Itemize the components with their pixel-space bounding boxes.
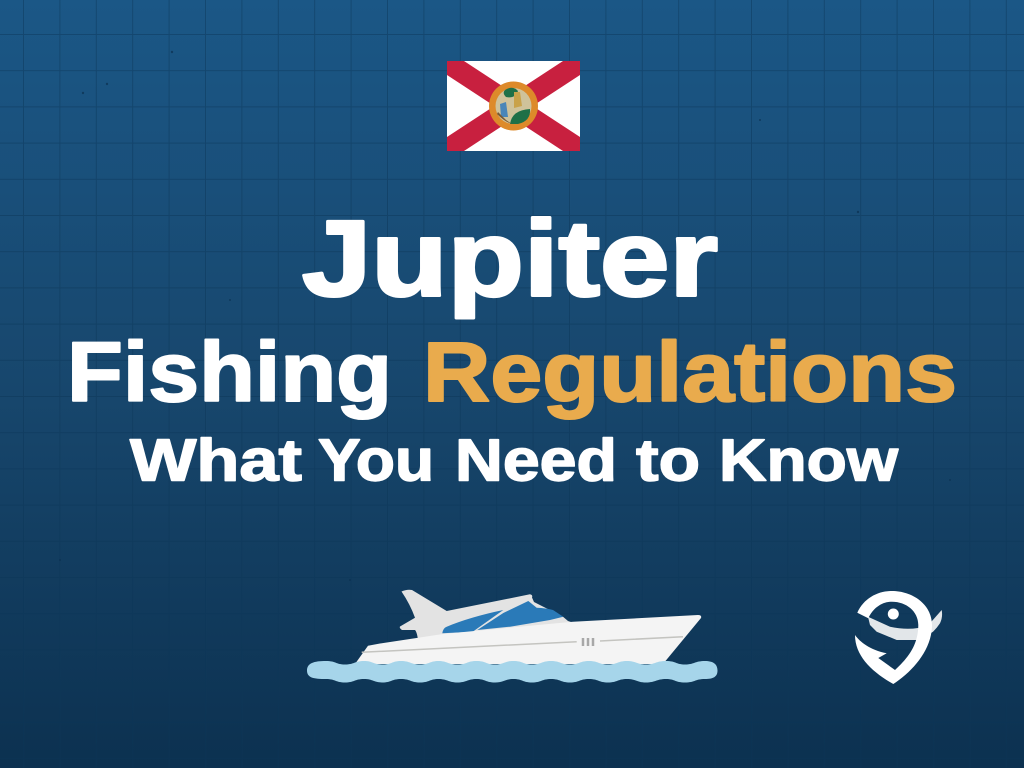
subtitle: You (318, 428, 434, 494)
icon: fish logo (855, 591, 942, 684)
icon: Florida flag (447, 61, 580, 151)
title: Jupiter: Jupiter (302, 198, 718, 318)
boat stripe (362, 637, 683, 652)
logo band (868, 610, 942, 640)
boat hull (355, 615, 701, 664)
subtitle (130, 428, 898, 494)
boat windows (442, 601, 563, 633)
heading: Fishing Regulations (67, 325, 957, 419)
water waves (307, 661, 718, 682)
subtitle: What (130, 428, 302, 494)
logo eye (888, 608, 899, 620)
subtitle: to (636, 428, 700, 494)
logo body (855, 591, 932, 684)
icon: boat (307, 590, 718, 682)
heading: Fishing Regulations: Fishing (67, 325, 392, 419)
subtitle: Know (719, 428, 898, 494)
subtitle: Need (455, 428, 617, 494)
boat cabin (400, 590, 574, 640)
heading: Fishing Regulations: Regulations (423, 325, 957, 419)
